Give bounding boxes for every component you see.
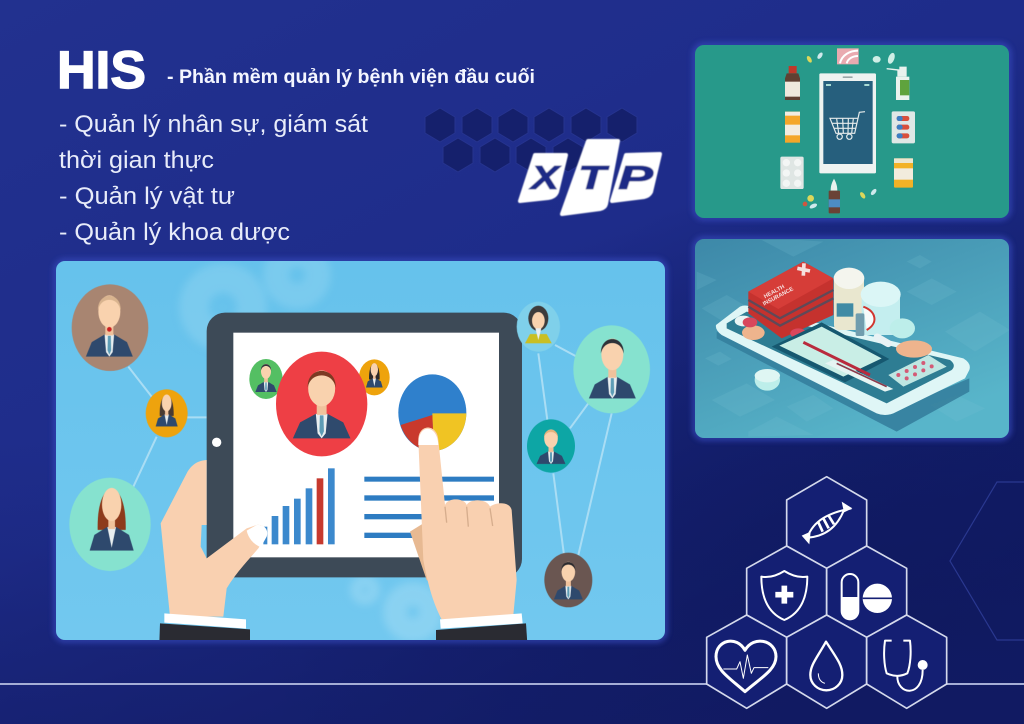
avatar: mint woman xyxy=(69,478,151,571)
icon: phone with cart xyxy=(819,73,876,173)
connection lines xyxy=(128,345,612,555)
panel: pharmacy phone xyxy=(695,45,1009,218)
hexagon medical icon group xyxy=(707,477,947,708)
red kit: HEALTH xyxy=(763,284,786,300)
icon: dropper bottle xyxy=(829,179,840,213)
feature list: - Quản lý nhân sự, giám sát xyxy=(59,111,368,138)
icon: capsule blister xyxy=(892,111,915,143)
left hand xyxy=(159,460,267,643)
red kit: INSURANCE xyxy=(762,286,795,307)
hexagon: DNA xyxy=(787,477,867,568)
title: HIS: HIS xyxy=(57,41,146,100)
panel: tablet with staff network xyxy=(56,254,665,643)
icon: loose pills xyxy=(803,48,896,210)
icon: yellow jar xyxy=(894,158,913,188)
bottles xyxy=(735,268,932,391)
hexagon: pills xyxy=(827,546,907,637)
faint outlined hexagon xyxy=(950,482,1024,640)
avatar: dark brown man xyxy=(544,553,592,607)
background tiles xyxy=(697,240,954,366)
hexagon: drop xyxy=(787,615,867,708)
hexagon: shield xyxy=(747,546,827,637)
icon: spray bottle xyxy=(887,67,909,100)
phone shadow xyxy=(717,332,969,432)
logo: XTP xyxy=(520,141,660,214)
hexagon: stethoscope xyxy=(867,615,947,708)
background gears xyxy=(194,254,431,630)
feature list xyxy=(59,111,368,246)
hexagon: heart xyxy=(707,615,787,708)
avatar: pale woman xyxy=(517,302,560,352)
avatars right xyxy=(517,302,650,607)
panel: isometric health app xyxy=(695,239,1010,438)
logo: XTP: X xyxy=(528,159,562,196)
avatar: red lead xyxy=(276,352,367,456)
logo: XTP: P xyxy=(618,159,655,196)
avatars left xyxy=(69,284,188,571)
icon: brown bottle xyxy=(785,66,800,100)
pill blister xyxy=(888,355,947,387)
logo: XTP: T xyxy=(578,159,610,196)
bar chart xyxy=(263,468,335,544)
medical chart tablet xyxy=(772,322,893,392)
icon: orange bottle xyxy=(785,112,800,143)
avatar: green xyxy=(249,359,283,399)
phone body xyxy=(716,305,970,415)
icon: tablet blister xyxy=(780,157,804,189)
red kit xyxy=(748,262,833,338)
avatar: teal man xyxy=(527,419,575,473)
avatar: brown xyxy=(72,284,148,371)
subtitle: - Phần mềm quản lý bệnh viện đầu cuối xyxy=(167,67,535,88)
feature list: - Quản lý khoa dược xyxy=(59,219,290,246)
panel glows xyxy=(56,45,1009,640)
right hand xyxy=(410,427,527,643)
baseline rule xyxy=(0,683,1024,685)
avatar: orange woman xyxy=(146,389,188,437)
avatar: orange small xyxy=(359,359,390,395)
feature list: - Quản lý vật tư xyxy=(59,183,235,210)
decorative hexagon cluster xyxy=(425,108,637,172)
tablet xyxy=(159,313,522,643)
feature list: thời gian thực xyxy=(59,147,214,174)
avatar: mint man xyxy=(573,325,650,413)
pie chart xyxy=(398,374,466,451)
text lines xyxy=(364,477,494,538)
